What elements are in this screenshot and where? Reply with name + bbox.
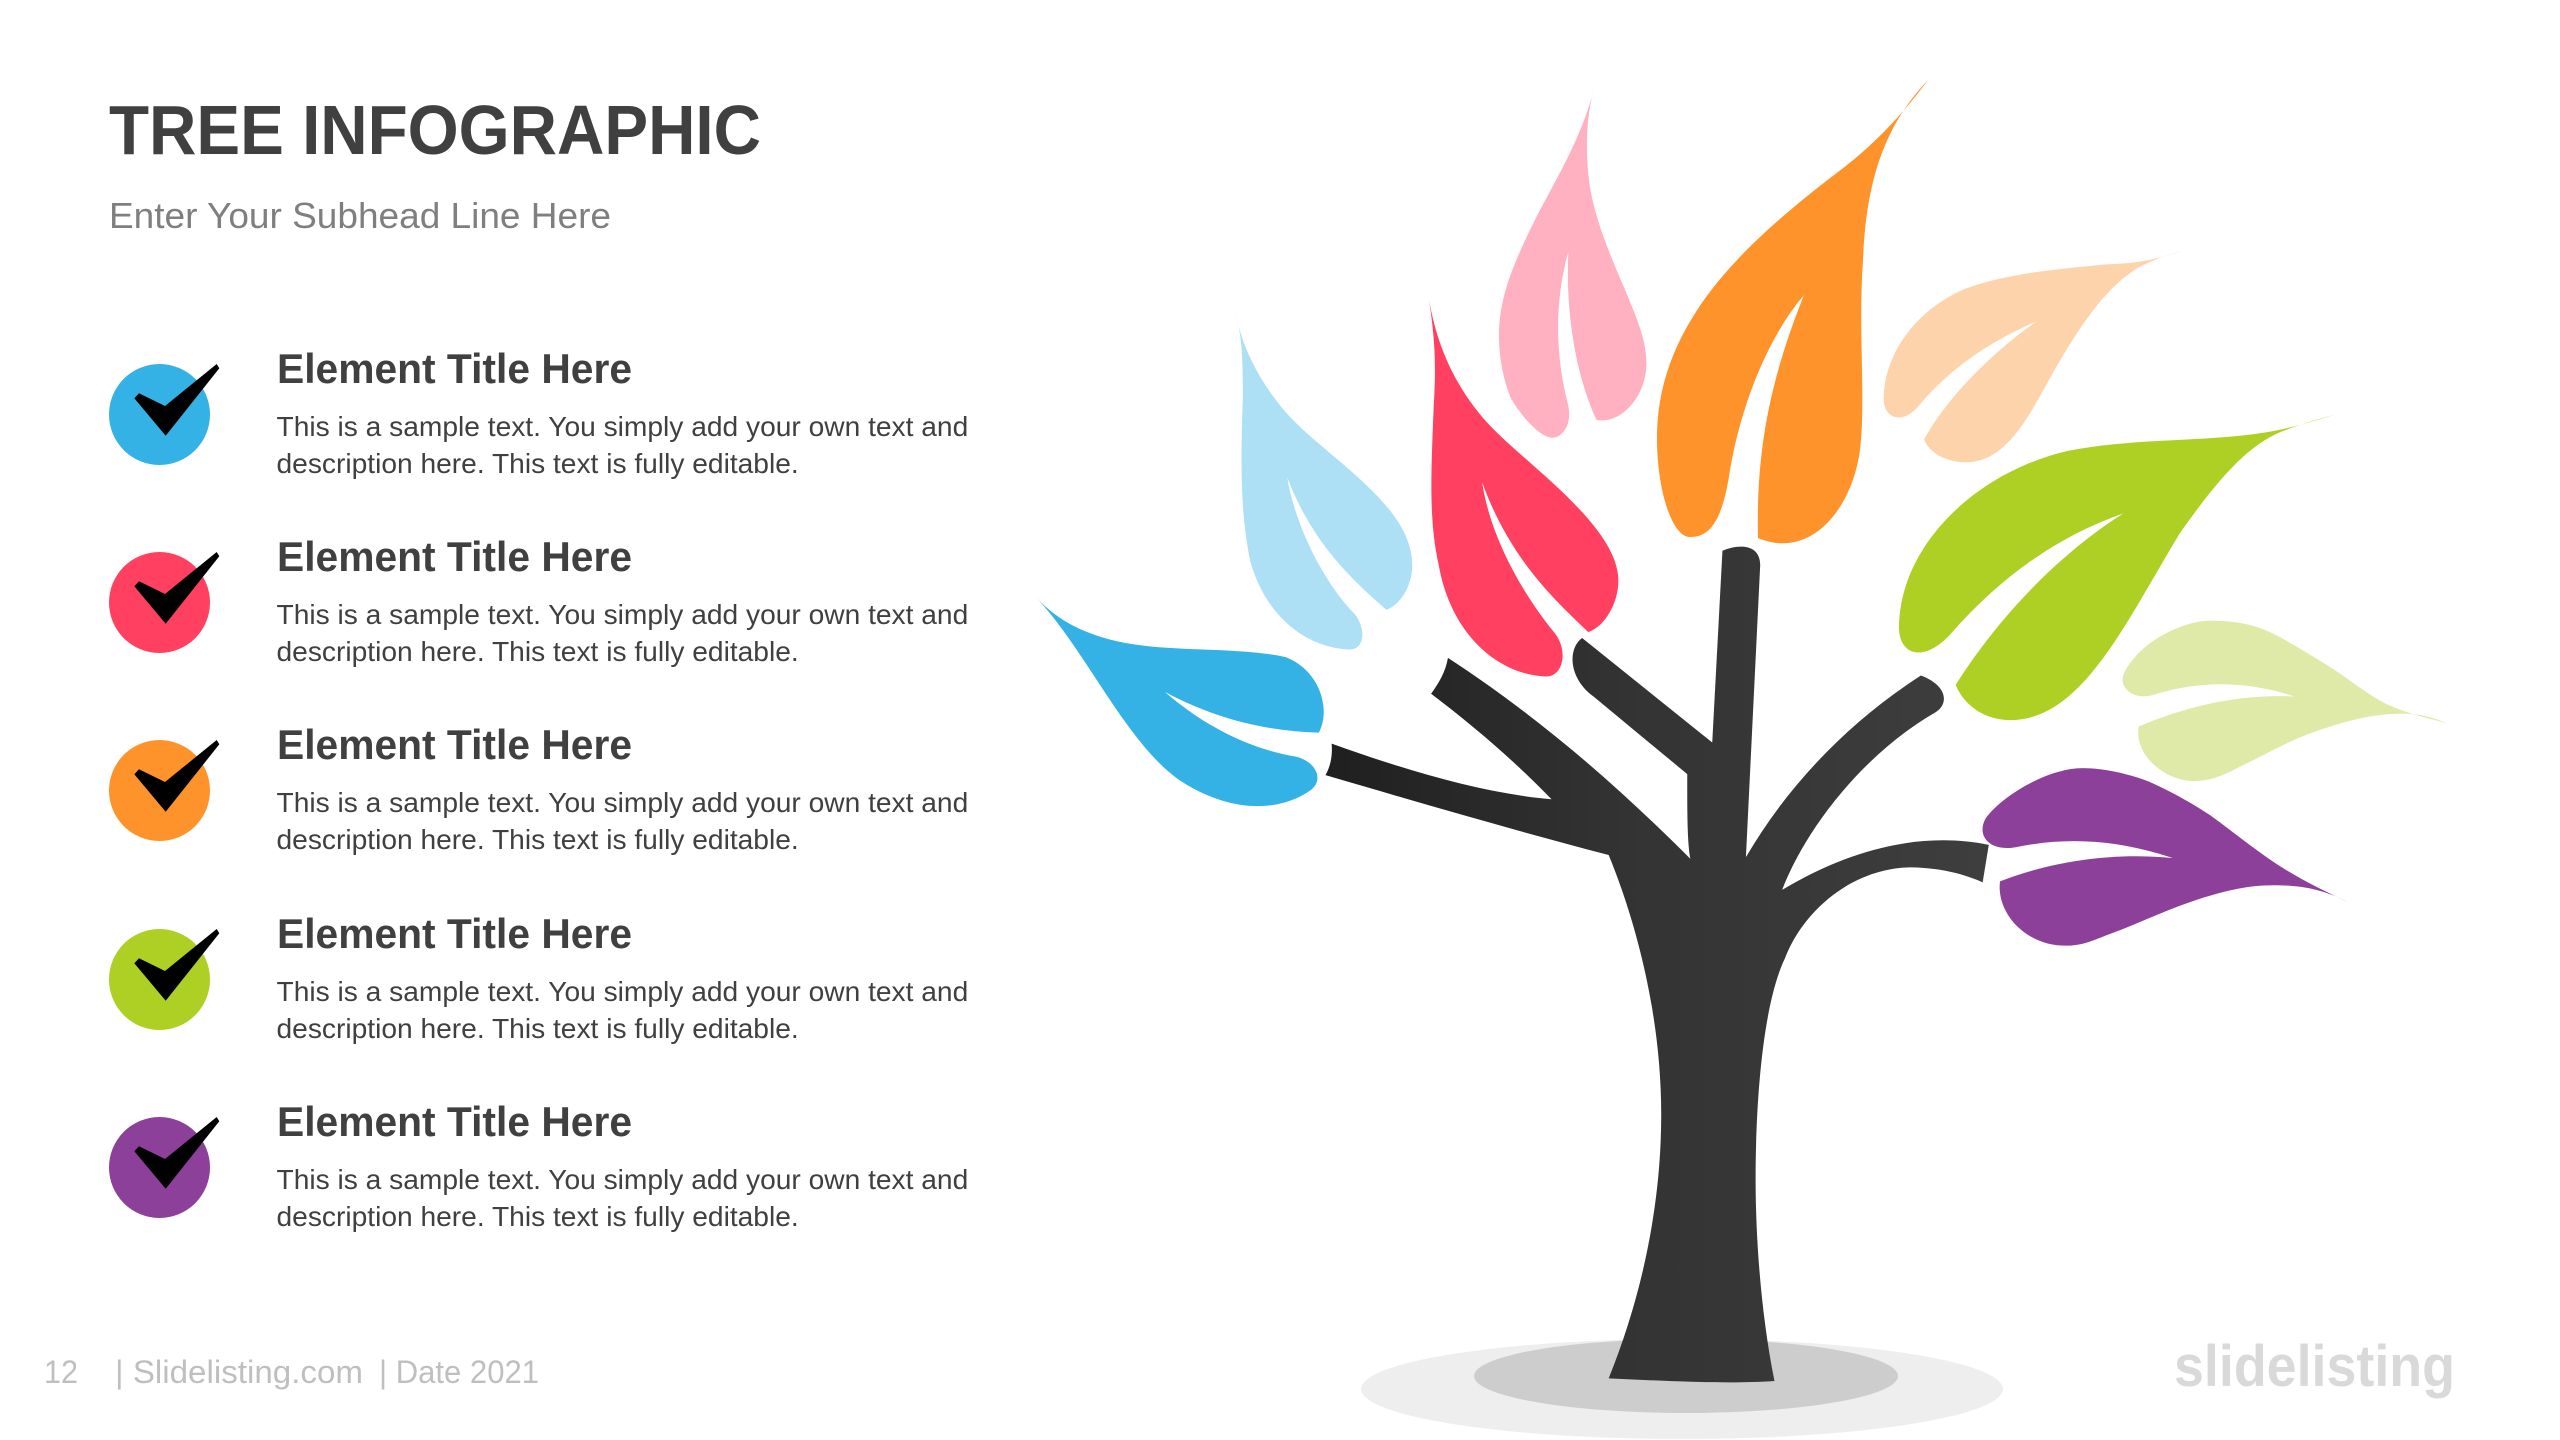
icon: purple check circle	[109, 1117, 219, 1218]
list item 3: orange	[109, 721, 968, 855]
item heading 2: Element Title Here	[277, 533, 632, 580]
icon: red check circle	[109, 552, 219, 653]
item heading 4: Element Title Here	[277, 910, 632, 957]
title: TREE INFOGRAPHIC	[109, 91, 761, 169]
item description 5: This is a sample text. You simply add your own text and	[276, 1163, 968, 1195]
item description 2: This is a sample text. You simply add your own text and	[276, 598, 968, 630]
leaf: blue	[1035, 596, 1324, 806]
item description 1: description here. This text is fully editable.	[276, 447, 799, 479]
tree trunk and branches	[1326, 547, 1989, 1382]
ground shadow inner	[1474, 1339, 1898, 1413]
item description 4: This is a sample text. You simply add your own text and	[276, 975, 968, 1007]
list item 5: purple	[109, 1098, 968, 1232]
item heading 1: Element Title Here	[277, 345, 632, 392]
leaf: red	[1429, 300, 1618, 677]
item description 3: description here. This text is fully editable.	[276, 823, 799, 855]
watermark logo: slidelisting	[2174, 1334, 2455, 1399]
icon: blue check circle	[109, 364, 219, 465]
page number: 12	[44, 1354, 78, 1390]
footer site: | Slidelisting.com	[115, 1354, 363, 1390]
item heading 3: Element Title Here	[277, 721, 632, 768]
item description 4: description here. This text is fully editable.	[276, 1012, 799, 1044]
list item 2: red	[109, 533, 968, 667]
item heading 5: Element Title Here	[277, 1098, 632, 1145]
leaf: pink	[1499, 85, 1646, 438]
leaf: light blue	[1236, 315, 1412, 649]
item description 5: description here. This text is fully editable.	[276, 1200, 799, 1232]
footer date: | Date 2021	[379, 1354, 539, 1390]
list item 1: blue	[109, 345, 968, 479]
subheading: Enter Your Subhead Line Here	[109, 195, 611, 236]
leaf: purple	[1983, 768, 2348, 946]
item description 3: This is a sample text. You simply add your own text and	[276, 786, 968, 818]
leaf: orange	[1657, 80, 1928, 543]
leaf: green	[1899, 413, 2340, 720]
footer	[44, 1354, 539, 1390]
item description 1: This is a sample text. You simply add your own text and	[276, 410, 968, 442]
ground shadow outer	[1361, 1339, 2003, 1439]
icon: orange check circle	[109, 740, 219, 841]
list item 4: green	[109, 910, 968, 1044]
leaf: peach	[1884, 251, 2182, 462]
leaf: light green	[2123, 621, 2447, 781]
item description 2: description here. This text is fully editable.	[276, 635, 799, 667]
tree illustration	[1035, 80, 2447, 1439]
icon: green check circle	[109, 929, 219, 1030]
